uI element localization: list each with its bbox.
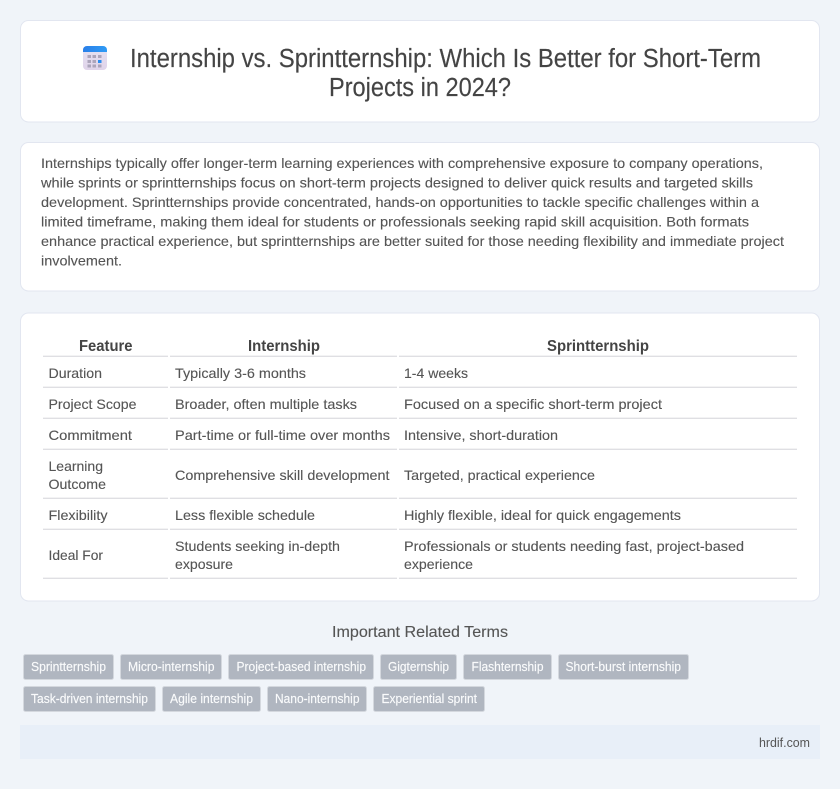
row: Duration: Duration xyxy=(48,365,102,381)
row: Ideal For: Professionals or students needing fast, project-based xyxy=(404,538,744,554)
tag list: related terms: Gigternship xyxy=(388,660,449,674)
table header row: Feature xyxy=(79,338,133,355)
tag list: related terms: Short-burst internship xyxy=(566,660,681,674)
heading: related terms: Important Related Terms xyxy=(332,624,508,641)
row: Ideal For xyxy=(43,538,797,578)
footer bar xyxy=(20,725,820,759)
row: Project Scope xyxy=(43,396,797,418)
summary text: enhance practical experience, but sprintternships are better suited for those needing flexibility and immediate project xyxy=(41,233,784,249)
summary text: while sprints or sprintternships focus on short-term projects designed to deliver quick results and targeted skills xyxy=(40,174,753,190)
row: Commitment: Part-time or full-time over months xyxy=(175,427,390,443)
row: Duration: Typically 3-6 months xyxy=(175,365,306,381)
table header row: Internship xyxy=(248,338,320,355)
summary text: development. Sprintternships provide concentrated, hands-on opportunities to tackle specific challenges within a xyxy=(41,194,759,210)
header panel xyxy=(20,20,820,122)
row: Duration xyxy=(43,365,797,387)
tag list: related terms: Sprintternship xyxy=(31,660,106,674)
summary text xyxy=(40,155,784,268)
summary text: involvement. xyxy=(41,252,122,268)
table header row: Sprintternship xyxy=(547,338,649,355)
row: Learning Outcome: Learning xyxy=(48,458,103,474)
row: Learning Outcome xyxy=(43,458,797,498)
row: Commitment xyxy=(43,427,797,449)
tag list: related terms: Agile internship xyxy=(170,692,253,706)
row: Commitment: Commitment xyxy=(48,427,132,443)
row: Flexibility: Flexibility xyxy=(48,507,108,523)
tag list: related terms: Project-based internship xyxy=(236,660,366,674)
title: Internship vs. Sprintternship: Which Is Better for Short-Term xyxy=(130,45,761,73)
row: Learning Outcome: Targeted, practical experience xyxy=(404,467,595,483)
row: Learning Outcome: Outcome xyxy=(48,476,106,492)
title: Projects in 2024? xyxy=(329,74,511,102)
row: Project Scope: Project Scope xyxy=(48,396,137,412)
row: Duration: 1-4 weeks xyxy=(404,365,468,381)
title xyxy=(130,45,761,102)
summary text: limited timeframe, making them ideal for students or professionals seeking rapid skill acquisition. Both formats xyxy=(41,214,749,230)
table header row xyxy=(43,338,797,356)
row: Flexibility xyxy=(43,507,797,529)
tag list: related terms: Task-driven internship xyxy=(31,692,148,706)
tag list: related terms xyxy=(24,654,688,712)
icon: calendar xyxy=(83,46,107,70)
tag list: related terms: Micro-internship xyxy=(128,660,215,674)
panel: summary paragraph xyxy=(20,142,820,291)
row: Ideal For: Ideal For xyxy=(48,547,103,563)
footer bar: hrdif.com xyxy=(759,736,810,750)
row: Project Scope: Broader, often multiple tasks xyxy=(175,396,357,412)
panel: comparison table xyxy=(20,313,820,601)
tag list: related terms: Nano-internship xyxy=(275,692,360,706)
row: Flexibility: Highly flexible, ideal for quick engagements xyxy=(404,507,681,523)
tag list: related terms: Experiential sprint xyxy=(382,692,478,706)
tag list: related terms: Flashternship xyxy=(472,660,544,674)
summary text: Internships typically offer longer-term learning experiences with comprehensive exposure to company operations, xyxy=(41,155,763,171)
row: Ideal For: Students seeking in-depth xyxy=(175,538,340,554)
row: Flexibility: Less flexible schedule xyxy=(175,507,315,523)
row: Learning Outcome: Comprehensive skill development xyxy=(175,467,390,483)
row: Commitment: Intensive, short-duration xyxy=(404,427,558,443)
row: Ideal For: experience xyxy=(404,556,473,572)
row: Ideal For: exposure xyxy=(175,556,233,572)
row: Project Scope: Focused on a specific short-term project xyxy=(404,396,662,412)
